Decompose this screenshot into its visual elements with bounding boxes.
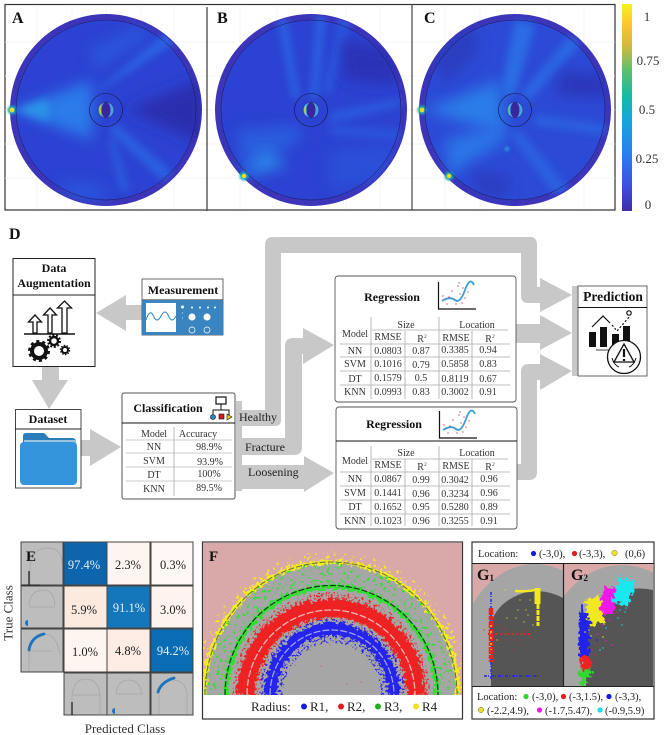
table: 0.3385 (441, 345, 469, 356)
G2 blue points (584, 612, 585, 656)
icon: chart with warning (589, 311, 640, 374)
table: 0.94 (479, 345, 497, 356)
colour bar: 0.5 (639, 102, 655, 117)
map B (215, 14, 407, 206)
table: 2 (424, 462, 427, 468)
flow labels (239, 410, 299, 479)
table: 0.91 (479, 387, 497, 398)
icon: regression plot (438, 281, 476, 309)
table: 0.8119 (441, 374, 469, 385)
table: 0.1016 (374, 359, 402, 370)
classification table: 100% (197, 469, 221, 480)
table: 0.0867 (374, 474, 402, 485)
table: 0.83 (479, 359, 497, 370)
colour bar: 0.75 (637, 53, 659, 68)
table (340, 446, 510, 527)
legend: G2 location: (-3,0), (532, 692, 558, 703)
table: 0.1023 (374, 516, 402, 527)
letter F: F (209, 549, 218, 565)
box: classification (122, 393, 235, 499)
table: 0.3042 (441, 475, 469, 486)
icon: folder (20, 433, 77, 485)
table: Model (342, 456, 368, 467)
table: 2 (492, 462, 495, 468)
legend: G2 location: (-1.7,5.47), (545, 706, 592, 717)
legend: radius: R2, (347, 699, 365, 714)
panel letters: B (217, 10, 228, 27)
table: 0.95 (412, 502, 430, 513)
G1 yellow points (515, 589, 539, 591)
colour bar: 1 (644, 9, 650, 24)
table: 0.89 (480, 502, 498, 513)
matrix values (68, 558, 189, 659)
matrix values: 3.0% (160, 603, 186, 617)
G2 magenta points (606, 588, 612, 614)
classification table: Accuracy (179, 429, 217, 440)
icon: regression plot (440, 410, 477, 438)
panel letters G1, G2: 2 (583, 573, 588, 583)
panel letters (12, 10, 436, 27)
matrix values: 94.2% (157, 644, 189, 658)
table: R (417, 462, 424, 473)
icon: rising arrows and gears (24, 301, 75, 360)
table: Location (459, 448, 495, 459)
classification table (126, 427, 232, 496)
table (340, 317, 510, 399)
matrix values: 91.1% (113, 601, 145, 615)
classification table: NN (147, 442, 161, 453)
table: 0.5 (415, 373, 427, 384)
legend: G1 location: (-3,0), (539, 549, 565, 560)
colour bar (622, 4, 659, 212)
table: 0.1652 (374, 502, 402, 513)
classification table: DT (147, 470, 161, 481)
table: 0.1441 (374, 488, 402, 499)
box: dataset: Dataset (29, 412, 67, 426)
legend: G2 location: (-0.9,5.9) (605, 706, 645, 717)
table: 0.91 (480, 516, 498, 527)
table: Size (397, 320, 415, 331)
matrix values: 2.3% (115, 558, 141, 572)
table: 0.99 (412, 475, 430, 486)
G1 blue points (484, 592, 540, 680)
true radius dashed curves (205, 562, 457, 695)
box: measurement: Measurement (148, 283, 218, 297)
table: Model (342, 329, 368, 340)
table: 0.67 (479, 374, 497, 385)
matrix values: 1.0% (72, 645, 98, 659)
scatter: R4 yellow (201, 558, 461, 695)
panel letters G1, G2: G (571, 567, 583, 584)
G2 red points (584, 648, 587, 670)
panel G: location scatter (471, 541, 655, 720)
legend: radius: R3, (384, 699, 402, 714)
box: regression loosening (336, 407, 517, 529)
table: Size (397, 448, 415, 459)
panel E: confusion matrix (0, 542, 193, 735)
scatter: R2 red (246, 607, 416, 695)
box: measurement (142, 279, 223, 335)
box: regression fracture (335, 276, 516, 402)
panel letters: A (12, 10, 24, 27)
box: regression fracture: Regression (364, 290, 420, 304)
matrix cells (64, 542, 193, 672)
G2 yellow points (592, 598, 598, 624)
table: R (417, 334, 424, 345)
table: SVM (344, 488, 366, 499)
table: NN (348, 474, 362, 485)
table: RMSE (442, 333, 470, 344)
heading D: D (9, 226, 21, 243)
table: NN (348, 346, 362, 357)
colour bar: 0 (645, 197, 651, 212)
legend: G2 location: Location: (477, 692, 517, 703)
table: DT (348, 502, 362, 513)
map A (8, 14, 205, 206)
panel: field maps A, B, C (5, 4, 615, 211)
box: classification: Classification (133, 401, 203, 415)
class icons, predicted class (64, 673, 193, 715)
box: data augmentation: Data (42, 261, 66, 275)
scatter: R1 blue (270, 629, 394, 695)
classification table: KNN (143, 484, 165, 495)
box: data augmentation: Augmentation (17, 276, 91, 290)
classification table: Model (141, 429, 167, 440)
box: prediction: Prediction (583, 289, 643, 304)
table: 0.83 (412, 387, 430, 398)
table: SVM (344, 359, 366, 370)
classification table: SVM (143, 456, 165, 467)
legend: G2 location: (-3,3), (615, 692, 641, 703)
legend: G1 location (478, 549, 646, 560)
matrix values: 4.8% (115, 644, 141, 658)
panel letters: C (424, 10, 436, 27)
table: 0.96 (480, 474, 498, 485)
table: 0.0803 (374, 346, 402, 357)
table: 0.87 (412, 346, 430, 357)
classification table: 89.5% (196, 483, 222, 494)
table: 0.3255 (441, 516, 469, 527)
legend: radius: Radius: (251, 699, 291, 714)
table: RMSE (374, 332, 402, 343)
table: 0.5858 (441, 359, 469, 370)
colour bar: 0.25 (636, 151, 658, 166)
legend: radius: R4 (422, 699, 438, 714)
classification table: 93.9% (197, 457, 223, 468)
legend: G1 location: Location: (478, 549, 518, 560)
panel letters G1, G2: 1 (489, 573, 494, 583)
letter E: E (26, 549, 36, 565)
table: DT (348, 374, 362, 385)
table: 2 (492, 334, 495, 340)
table: 0.1579 (374, 373, 402, 384)
table: 0.79 (412, 360, 430, 371)
plot G1 (473, 564, 563, 686)
legend: G2 location: (-2.2,4.9), (487, 706, 529, 717)
table: 0.0993 (374, 387, 402, 398)
legend: G2 location: (-3,1.5), (569, 692, 603, 703)
stray points (295, 640, 375, 684)
matrix values: 5.9% (71, 603, 97, 617)
table: 0.96 (412, 489, 430, 500)
box: data augmentation (13, 258, 95, 366)
matrix values: 97.4% (68, 558, 100, 572)
legend: radius: R1, (310, 699, 328, 714)
flow labels: Healthy (239, 410, 277, 424)
G2 cyan points (620, 580, 627, 604)
table: 0.96 (480, 488, 498, 499)
icon: oscilloscope (142, 300, 223, 335)
table: 0.3234 (441, 489, 469, 500)
flow arrows (32, 237, 578, 492)
legend: G2 location (477, 692, 645, 717)
scatter: R3 green (217, 574, 446, 695)
table: 2 (424, 334, 427, 340)
classification table: 98.9% (196, 442, 222, 453)
icon: hierarchy (210, 397, 232, 420)
G1 red points (489, 608, 493, 662)
table: R (485, 462, 492, 473)
panel letters G1, G2: G (477, 567, 489, 584)
flow labels: Fracture (245, 440, 285, 454)
table: KNN (344, 516, 366, 527)
table: R (485, 334, 492, 345)
table: 0.3002 (441, 387, 469, 398)
flow labels: Loosening (248, 465, 299, 479)
legend: G1 location: (0,6) (625, 549, 646, 560)
panel F: radius scatter (201, 542, 462, 719)
plot G2 (564, 564, 653, 686)
axis label: true class: True Class (0, 585, 16, 641)
table: RMSE (442, 461, 470, 472)
panel letters G1, G2 (477, 567, 588, 584)
matrix values: 0.3% (160, 558, 186, 572)
map C (418, 14, 611, 206)
box: dataset (15, 410, 81, 488)
box: regression loosening: Regression (366, 417, 422, 431)
table: KNN (344, 387, 366, 398)
table: 0.96 (412, 516, 430, 527)
table: RMSE (374, 460, 402, 471)
legend: radius (251, 699, 438, 714)
table: Location (459, 320, 495, 331)
legend: G1 location: (-3,3), (579, 549, 605, 560)
box: prediction (578, 286, 647, 376)
G2 green points (578, 666, 592, 690)
table: 0.5280 (441, 502, 469, 513)
class icons, true class (21, 542, 63, 672)
